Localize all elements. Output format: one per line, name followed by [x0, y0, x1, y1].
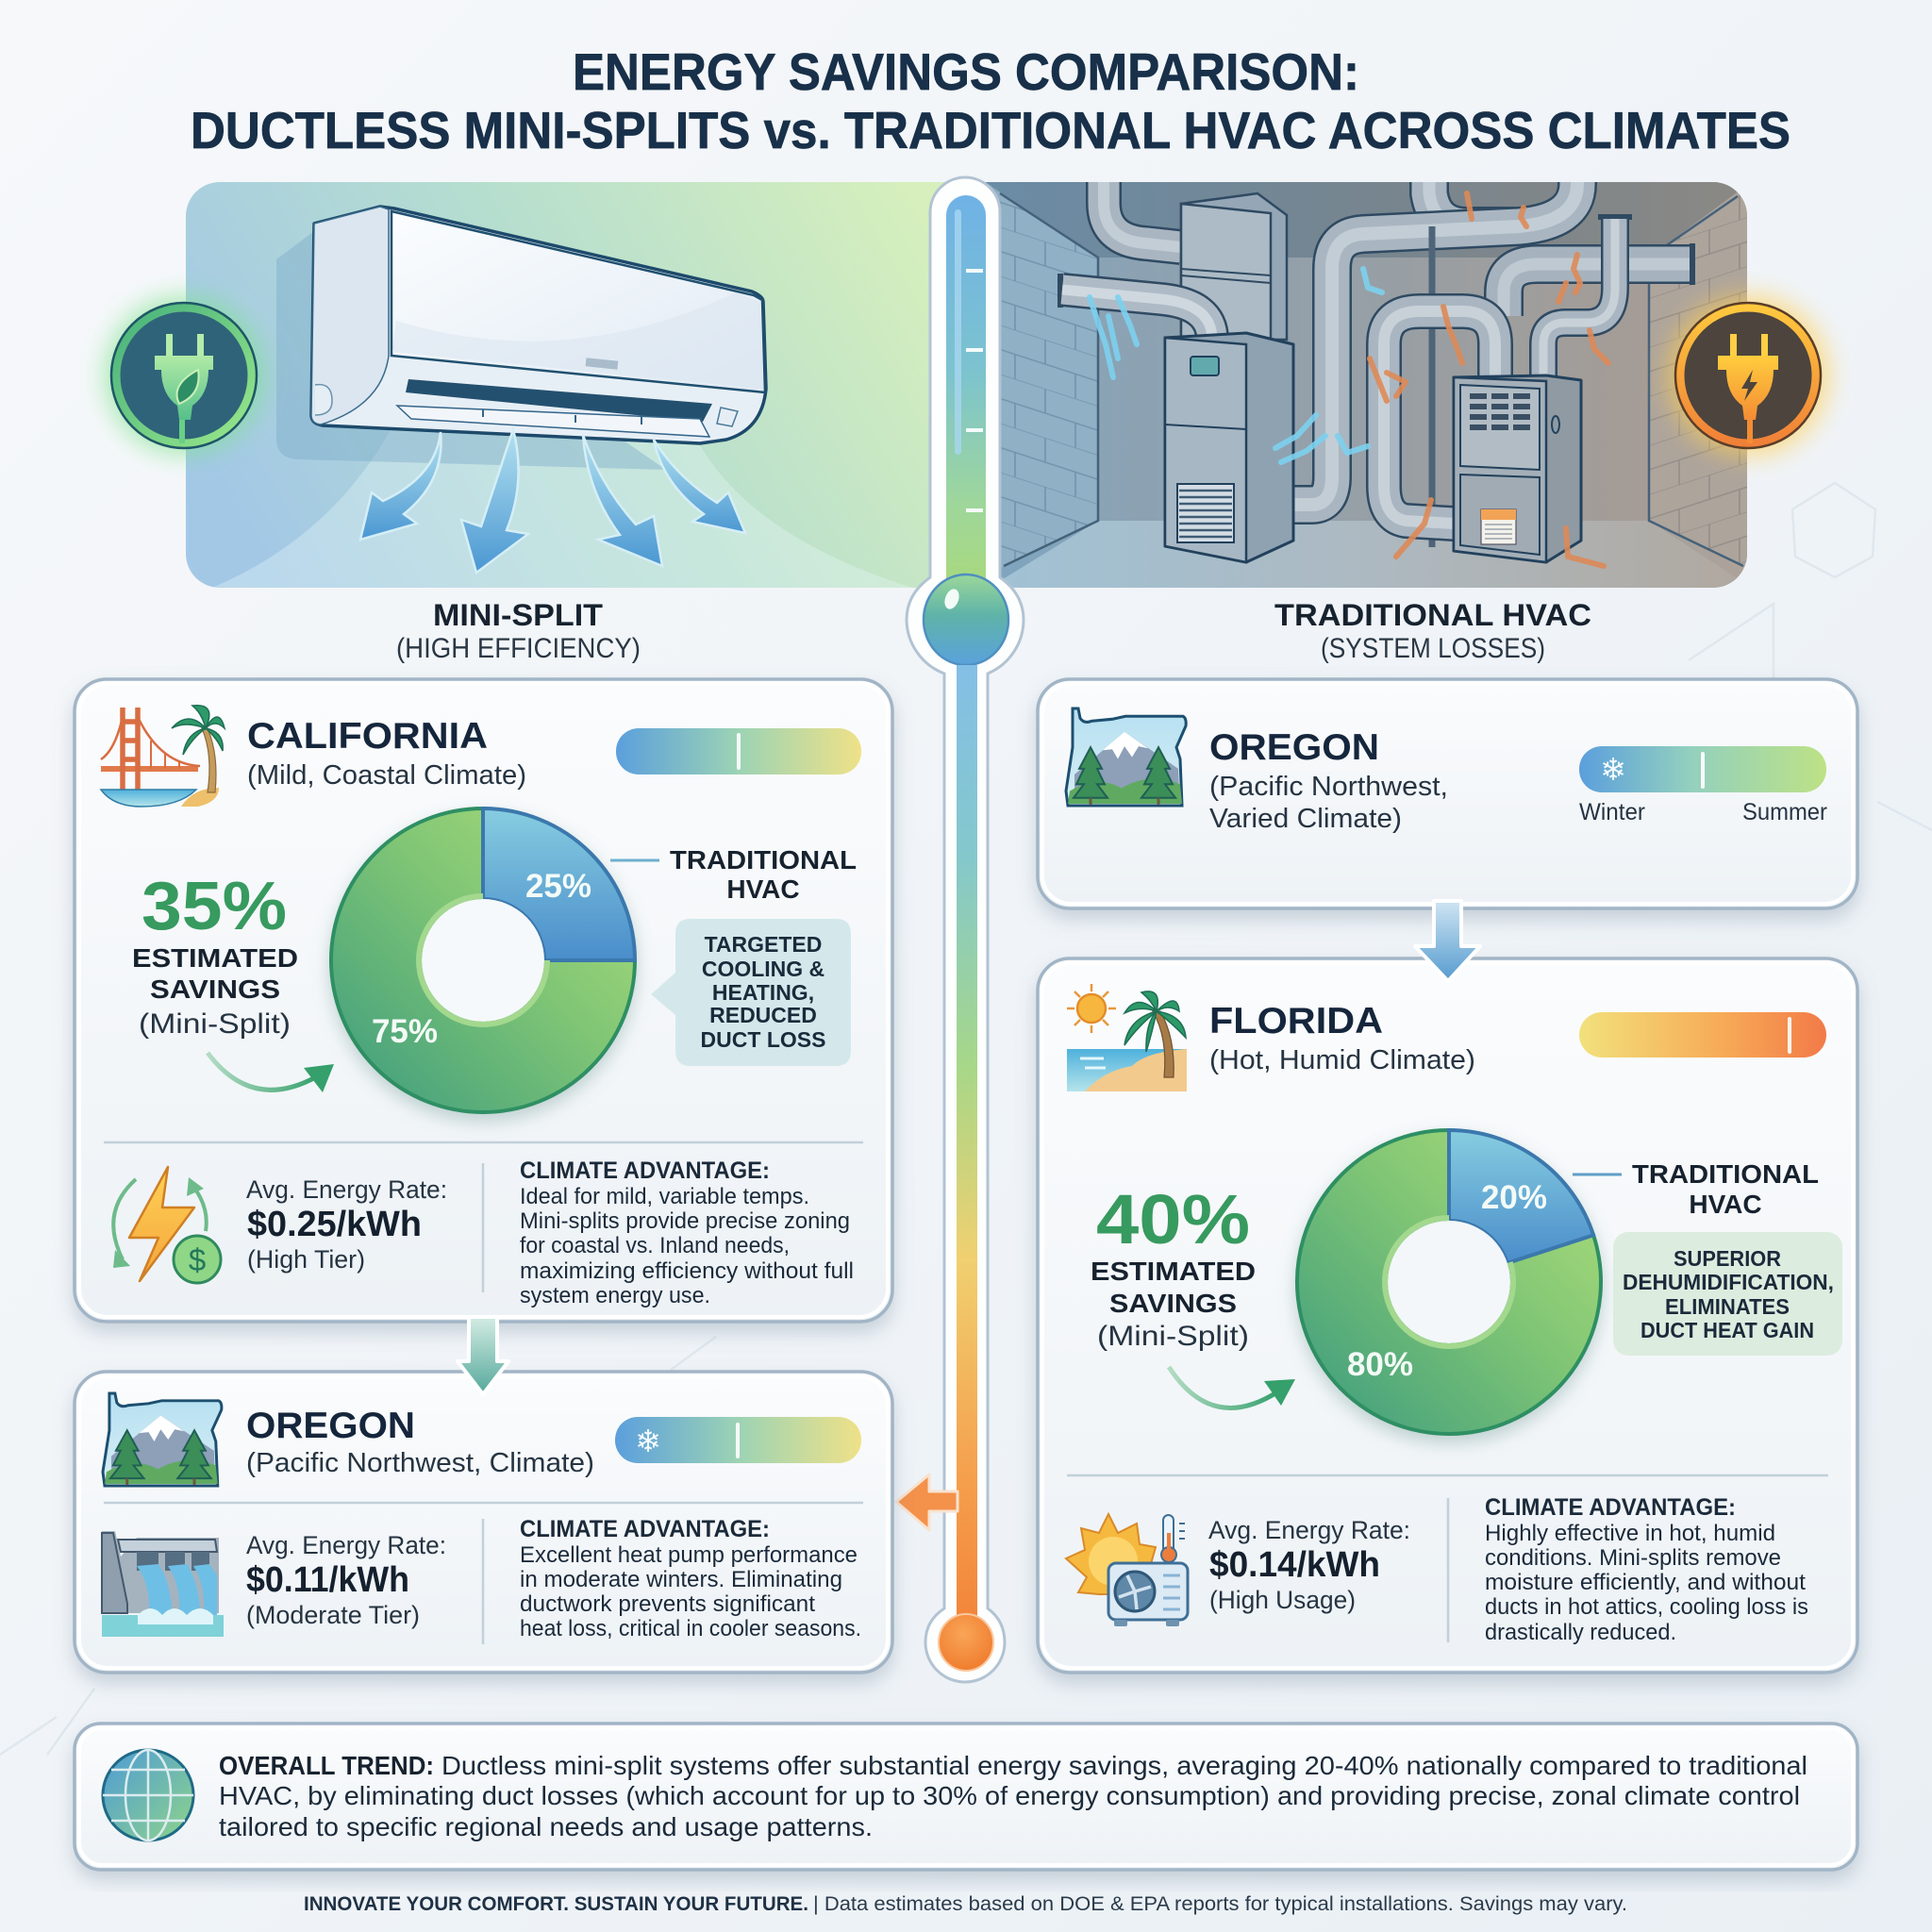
icon: lightning and dollar: $: [189, 1242, 206, 1277]
donut chart: 25%: [525, 868, 591, 905]
callout: DUCT HEAT GAIN: [1641, 1318, 1814, 1342]
wall shadow: [276, 231, 666, 470]
climate advantage: Mini-splits provide precise zoning: [520, 1208, 850, 1234]
donut chart: 20%: [1481, 1179, 1547, 1216]
title: [191, 42, 1790, 159]
energy rate: Avg. Energy Rate:: [1208, 1516, 1410, 1544]
arrow to chart: [208, 1053, 334, 1092]
climate advantage: moisture efficiently, and without: [1485, 1570, 1806, 1595]
heading: traditional hvac: [1274, 598, 1591, 664]
climate advantage: Ideal for mild, variable temps.: [520, 1184, 809, 1209]
air conditioner unit: [311, 207, 766, 443]
legend: traditional hvac: [610, 845, 857, 904]
upper bulb: [924, 575, 1008, 665]
air flow cone: [212, 428, 912, 588]
heading: traditional hvac: (SYSTEM LOSSES): [1321, 633, 1545, 664]
legend: traditional hvac: [1573, 1159, 1819, 1219]
panel: oregon right: [1038, 679, 1857, 908]
trend text: tailored to specific regional needs and usage patterns.: [219, 1812, 873, 1841]
energy rate: (Moderate Tier): [246, 1601, 420, 1629]
climate advantage: [520, 1158, 854, 1308]
heading: FLORIDA: [1209, 1001, 1383, 1041]
savings stat: ESTIMATED: [132, 943, 298, 973]
energy rate: Avg. Energy Rate:: [246, 1175, 447, 1204]
savings stat: (Mini-Split): [139, 1008, 291, 1040]
icon: globe: [103, 1750, 193, 1840]
climate advantage: in moderate winters. Eliminating: [520, 1567, 842, 1592]
seasonal bar: Winter: [1579, 799, 1645, 825]
heading: mini-split: MINI-SPLIT: [433, 598, 603, 632]
right furnace: [1454, 375, 1581, 562]
icon: wasteful plug badge: [1667, 294, 1829, 457]
climate advantage: [1485, 1494, 1808, 1645]
savings stat: ESTIMATED: [1091, 1257, 1256, 1286]
climate advantage: CLIMATE ADVANTAGE:: [520, 1158, 770, 1184]
energy rate: [246, 1531, 446, 1629]
panel: california: [75, 679, 892, 1322]
climate advantage: for coastal vs. Inland needs,: [520, 1233, 790, 1258]
cold air arrows: [360, 429, 745, 573]
climate advantage: CLIMATE ADVANTAGE:: [1485, 1494, 1736, 1521]
left air handler: [1165, 333, 1293, 562]
seasonal bar: Summer: [1742, 799, 1827, 825]
callout: [1613, 1232, 1842, 1356]
icon: oregon: [103, 1393, 222, 1486]
heading: [246, 1406, 594, 1478]
temperature ticks: [966, 271, 983, 510]
climate advantage: CLIMATE ADVANTAGE:: [520, 1516, 770, 1542]
title: DUCTLESS MINI-SPLITS vs. TRADITIONAL HVAC ACROSS CLIMATES: [191, 101, 1790, 159]
upper tube fill: [946, 195, 986, 585]
climate advantage: ductwork prevents significant: [520, 1591, 815, 1617]
flanges: [1058, 214, 1695, 308]
heading: mini-split: (HIGH EFFICIENCY): [396, 633, 641, 664]
energy rate: Avg. Energy Rate:: [246, 1531, 446, 1559]
thermometer outer glass: [907, 177, 1024, 1682]
heading: (Pacific Northwest, Climate): [246, 1448, 594, 1478]
heading: [1209, 1001, 1475, 1075]
donut chart: 75%: [372, 1013, 438, 1050]
panel: traditional hvac illustration: [943, 175, 1755, 590]
climate advantage: drastically reduced.: [1485, 1620, 1676, 1645]
lower tube fill: [957, 665, 977, 1623]
icon: lightning and dollar: [113, 1167, 221, 1283]
donut chart: 80%: [1347, 1346, 1413, 1383]
cold air leaks: [1090, 269, 1382, 462]
callout: [651, 919, 851, 1066]
trend text: HVAC, by eliminating duct losses (which account for up to 30% of energy consumption) and providing precise, zonal climate control: [219, 1781, 1800, 1810]
icon: golden gate and palm: [101, 706, 225, 807]
climate bar: [1579, 1012, 1826, 1058]
heading: (Pacific Northwest,: [1209, 772, 1448, 802]
climate advantage: maximizing efficiency without full: [520, 1258, 854, 1284]
heading: mini-split: [396, 598, 641, 664]
climate advantage: heat loss, critical in cooler seasons.: [520, 1616, 861, 1641]
panel: overall trend: [75, 1724, 1857, 1870]
arrow to chart: [1169, 1367, 1295, 1407]
panel: oregon left: [75, 1372, 892, 1673]
climate bar: [616, 728, 861, 774]
heading: OREGON: [1209, 727, 1379, 768]
back wall: [1098, 258, 1649, 521]
heading: CALIFORNIA: [247, 716, 488, 757]
thermometer: [896, 177, 1024, 1682]
heading: OREGON: [246, 1406, 415, 1446]
legend: traditional hvac: TRADITIONAL: [1632, 1159, 1819, 1189]
heading: Varied Climate): [1209, 804, 1402, 834]
ceiling: [981, 179, 1755, 258]
icon: efficient plug badge: [105, 296, 263, 455]
climate advantage: [520, 1516, 861, 1641]
panel: florida: [1038, 958, 1857, 1673]
footer: [304, 1893, 1627, 1915]
climate advantage: conditions. Mini-splits remove: [1485, 1545, 1781, 1571]
savings stat: [1091, 1180, 1256, 1352]
tall air handler duct box: [1181, 193, 1287, 340]
legend: traditional hvac: HVAC: [726, 874, 800, 904]
lower bulb: [939, 1614, 993, 1671]
trend text: [219, 1751, 1807, 1841]
trend text: Ductless mini-split systems offer substantial energy savings, averaging 20-40% nationally compared to traditional: [441, 1751, 1807, 1780]
heading: traditional hvac: TRADITIONAL HVAC: [1274, 598, 1591, 632]
climate advantage: Excellent heat pump performance: [520, 1542, 858, 1568]
climate advantage: ducts in hot attics, cooling loss is: [1485, 1594, 1808, 1620]
icon: sun and outdoor unit: [1066, 1514, 1188, 1626]
callout: ELIMINATES: [1665, 1294, 1790, 1319]
savings stat: SAVINGS: [150, 974, 280, 1004]
climate bar: [615, 1417, 861, 1463]
energy rate: $0.14/kWh: [1209, 1545, 1380, 1585]
savings stat: 40%: [1096, 1180, 1250, 1258]
climate advantage: system energy use.: [520, 1283, 710, 1308]
callout: DUCT LOSS: [701, 1027, 825, 1052]
savings stat: (Mini-Split): [1097, 1321, 1249, 1352]
energy rate: (High Tier): [247, 1245, 365, 1274]
callout: DEHUMIDIFICATION,: [1623, 1270, 1834, 1294]
climate bar: ❄: [635, 1423, 661, 1459]
heading: (Mild, Coastal Climate): [247, 760, 526, 791]
title: ENERGY SAVINGS COMPARISON:: [573, 42, 1359, 101]
ducts: [1104, 175, 1692, 505]
icon: hydro dam: [102, 1531, 224, 1637]
footer: INNOVATE YOUR COMFORT. SUSTAIN YOUR FUTURE.: [304, 1893, 808, 1915]
hot air leaks: [1370, 193, 1608, 566]
donut chart: [331, 808, 635, 1112]
savings stat: 35%: [142, 869, 287, 944]
energy rate: [246, 1175, 447, 1274]
seasonal bar: [1579, 746, 1827, 825]
arrow: oregon to florida: [1415, 901, 1480, 981]
icon: sun, beach and palm: [1067, 984, 1187, 1091]
heading: [1209, 727, 1448, 834]
arrow: california to oregon: [458, 1317, 508, 1394]
energy rate: (High Usage): [1209, 1586, 1356, 1614]
panel: mini-split illustration: [186, 182, 978, 588]
callout: COOLING &: [702, 957, 824, 981]
icon: oregon: [1066, 708, 1186, 806]
callout: SUPERIOR: [1674, 1246, 1781, 1271]
callout: TARGETED: [705, 932, 822, 957]
brick walls: [991, 187, 1096, 568]
floor: [986, 521, 1755, 590]
callout: HEATING,: [712, 980, 814, 1005]
seasonal bar: ❄: [1600, 751, 1626, 788]
savings stat: SAVINGS: [1109, 1289, 1237, 1318]
legend: traditional hvac: TRADITIONAL: [670, 845, 857, 874]
energy rate: $0.25/kWh: [247, 1205, 422, 1244]
heading: (Hot, Humid Climate): [1209, 1045, 1475, 1075]
footer: | Data estimates based on DOE & EPA reports for typical installations. Savings may vary.: [813, 1893, 1627, 1915]
vertical small pipe: [1428, 226, 1436, 547]
callout: REDUCED: [709, 1003, 817, 1027]
donut chart: [1297, 1130, 1601, 1434]
arrow: thermometer to oregon: [896, 1474, 958, 1530]
climate advantage: Highly effective in hot, humid: [1485, 1521, 1775, 1546]
heading: [247, 716, 526, 791]
energy rate: $0.11/kWh: [246, 1560, 409, 1600]
trend text: OVERALL TREND:: [219, 1751, 434, 1780]
legend: traditional hvac: HVAC: [1689, 1190, 1762, 1219]
energy rate: [1208, 1516, 1410, 1614]
savings stat: [132, 869, 298, 1040]
